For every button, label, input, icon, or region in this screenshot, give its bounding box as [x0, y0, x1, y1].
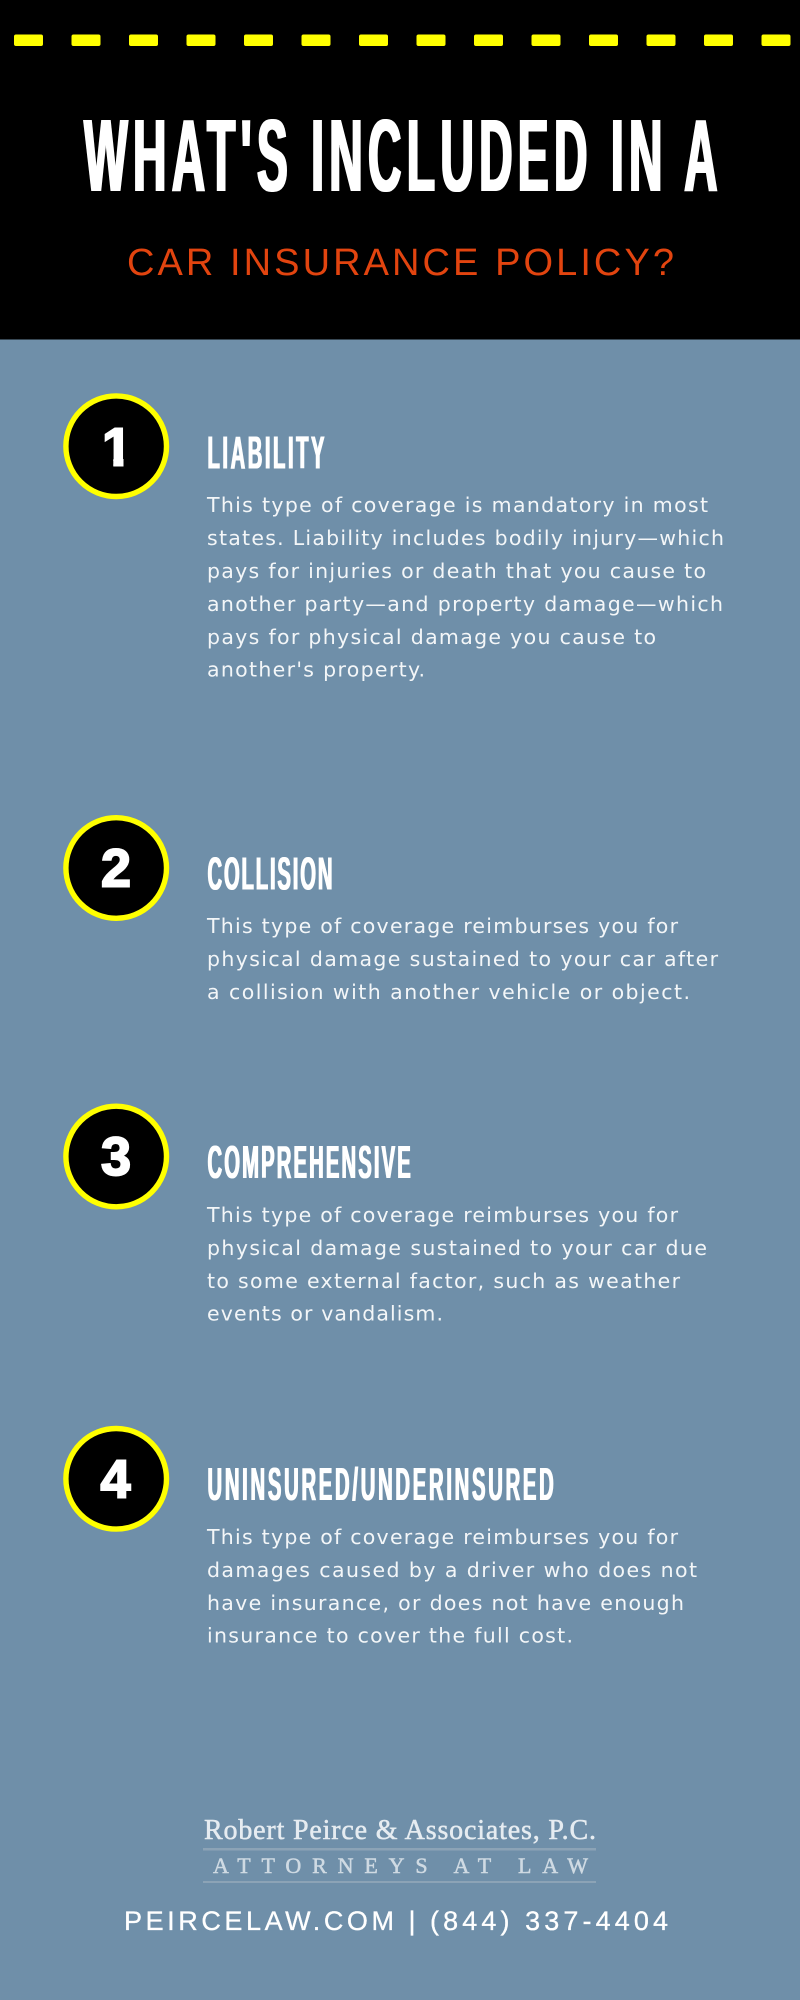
number badge 4: 4: [100, 1450, 131, 1510]
body text: comprehensive: to some external factor, such as weather: [207, 1269, 681, 1293]
body text: uninsured/underinsured: [206, 1525, 697, 1648]
number badge 4: [66, 1428, 166, 1529]
contact line: |: [408, 1906, 416, 1936]
body text: liability: This type of coverage is mandatory in most: [206, 493, 708, 517]
section 4: uninsured/underinsured: [66, 1428, 697, 1648]
body text: liability: pays for physical damage you cause to: [207, 625, 656, 649]
heading: uninsured/underinsured: UNINSURED/UNDERINSURED: [208, 1459, 554, 1510]
body text: comprehensive: physical damage sustained to your car due: [207, 1236, 707, 1260]
heading: liability: LIABILITY: [208, 427, 325, 479]
body text: collision: physical damage sustained to your car after: [207, 947, 719, 971]
road dashes: [14, 34, 790, 46]
number badge 1: 1: [102, 418, 132, 478]
contact line: [124, 1906, 668, 1936]
body text: liability: another party—and property damage—which: [207, 592, 723, 616]
contact line: (844) 337-4404: [430, 1906, 668, 1936]
body text: comprehensive: events or vandalism.: [207, 1302, 443, 1326]
body text: comprehensive: [206, 1203, 707, 1326]
section 3: comprehensive: [66, 1106, 707, 1326]
body text: liability: states. Liability includes bodily injury—which: [207, 526, 724, 550]
number badge 2: [66, 818, 166, 918]
number badge 3: [66, 1106, 166, 1207]
law firm logo: Robert Peirce & Associates, P.C.: [204, 1815, 596, 1846]
law firm logo: [203, 1815, 596, 1883]
panel: black header: [0, 0, 800, 340]
number badge 2: 2: [101, 838, 131, 898]
body text: collision: This type of coverage reimburses you for: [206, 914, 679, 938]
body text: comprehensive: This type of coverage reimburses you for: [206, 1203, 679, 1227]
body text: uninsured/underinsured: This type of coverage reimburses you for: [206, 1525, 679, 1549]
contact line: PEIRCELAW.COM: [124, 1906, 394, 1936]
subtitle: CAR INSURANCE POLICY?: [127, 242, 674, 284]
body text: liability: [206, 493, 724, 682]
body text: liability: pays for injuries or death that you cause to: [207, 559, 706, 583]
body text: uninsured/underinsured: damages caused by a driver who does not: [207, 1558, 697, 1582]
body text: uninsured/underinsured: insurance to cover the full cost.: [207, 1624, 573, 1648]
number badge 3: 3: [101, 1127, 131, 1187]
title: WHAT'S INCLUDED IN A: [84, 98, 718, 213]
body text: liability: another's property.: [207, 658, 425, 682]
body text: collision: [206, 914, 719, 1004]
footer: [124, 1815, 668, 1936]
number badge 1: [66, 396, 166, 497]
body text: collision: a collision with another vehicle or object.: [207, 980, 690, 1004]
section 2: collision: [66, 818, 719, 1004]
law firm logo: ATTORNEYS AT LAW: [213, 1853, 588, 1878]
section 1: liability: [66, 396, 724, 682]
body text: uninsured/underinsured: have insurance, or does not have enough: [207, 1591, 684, 1615]
heading: comprehensive: COMPREHENSIVE: [208, 1137, 411, 1188]
heading: collision: COLLISION: [208, 848, 332, 900]
